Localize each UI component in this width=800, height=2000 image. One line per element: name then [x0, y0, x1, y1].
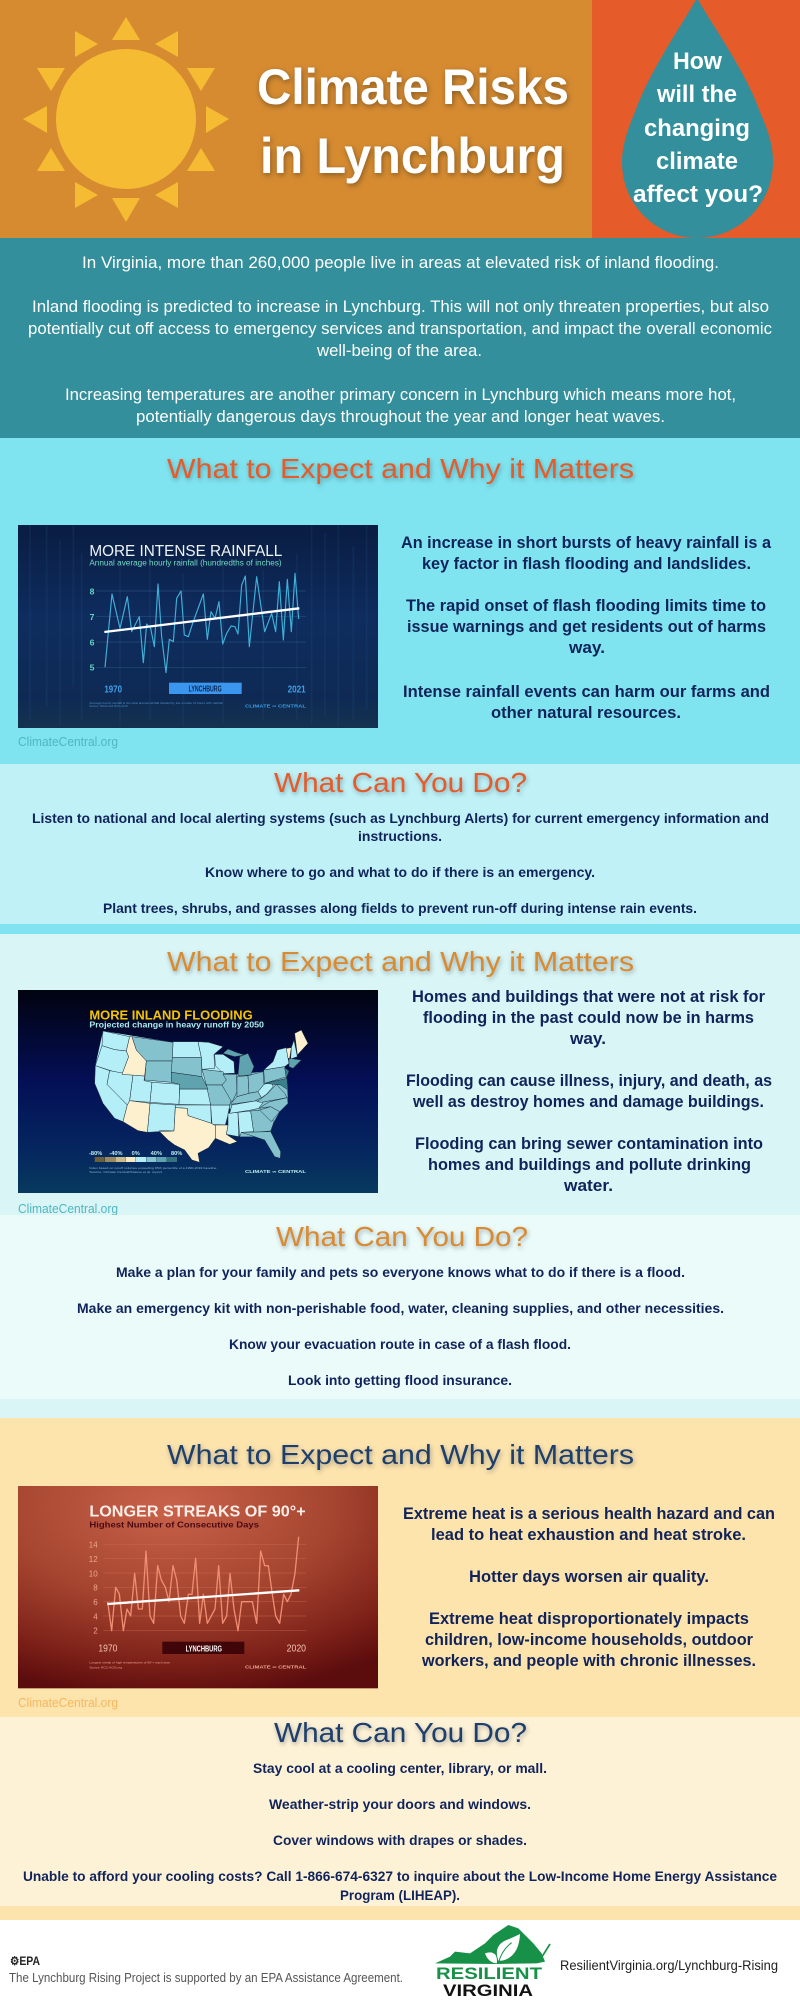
- body text: Hotter days worsen air quality.: [469, 1568, 709, 1586]
- intro paragraph 2: potentially cut off access to emergency services and transportation, and impact the overall economic: [28, 320, 772, 338]
- map: more inland flooding: -40%: [109, 1151, 123, 1157]
- chart: longer streaks of 90 degrees: Source: RCC-ACIS.org: [89, 1666, 123, 1670]
- chart: longer streaks of 90 degrees: Longest streak of high temperatures of 90°+ each year: [89, 1661, 170, 1665]
- chart: longer streaks of 90 degrees: 6: [93, 1598, 98, 1607]
- panel: introduction: [0, 238, 800, 438]
- map: more inland flooding: -80%: [89, 1151, 102, 1157]
- logo: Resilient Virginia: [435, 1925, 550, 2000]
- body text: An increase in short bursts of heavy rainfall is a: [401, 534, 772, 552]
- chart: more intense rainfall: 1970: [104, 684, 122, 695]
- logo: Resilient Virginia: RESILIENT: [436, 1964, 543, 1983]
- chart: more intense rainfall: 7: [90, 612, 95, 622]
- chart: longer streaks of 90 degrees: LYNCHBURG: [186, 1644, 222, 1653]
- body text: Intense rainfall events can harm our farms and: [403, 683, 770, 701]
- action list: Look into getting flood insurance.: [288, 1373, 512, 1388]
- body text: [403, 1505, 775, 1670]
- funding note: The Lynchburg Rising Project is supported by an EPA Assistance Agreement.: [9, 1971, 403, 1985]
- chart: more intense rainfall: LYNCHBURG: [189, 684, 222, 693]
- body text: other natural resources.: [491, 704, 681, 722]
- chart: more intense rainfall: MORE INTENSE RAINFALL: [89, 543, 283, 560]
- chart: longer streaks of 90 degrees: 12: [89, 1555, 98, 1564]
- body text: workers, and people with chronic illnesses.: [421, 1652, 756, 1670]
- image credit: ClimateCentral.org: [18, 1695, 118, 1710]
- body text: [401, 534, 772, 722]
- panel: rainfall what can you do: [0, 764, 800, 934]
- action list: [32, 811, 769, 916]
- drop question text: How: [673, 48, 722, 75]
- map: more inland flooding: Source: Climate Central/Srauss et al. report: [89, 1170, 162, 1174]
- chart: longer streaks of 90 degrees: CLIMATE ∞ CENTRAL: [245, 1665, 307, 1670]
- map: more inland flooding: 0%: [132, 1151, 140, 1157]
- chart: more intense rainfall: 6: [90, 637, 95, 647]
- chart: longer streaks of 90 degrees: 1970: [98, 1644, 118, 1655]
- body text: [406, 988, 772, 1195]
- body text: Flooding can bring sewer contamination into: [415, 1135, 763, 1153]
- panel: heat what to expect: [0, 1418, 800, 1717]
- drop question text: climate: [656, 148, 738, 175]
- action list: Plant trees, shrubs, and grasses along fields to prevent run-off during intense rain events.: [103, 901, 697, 916]
- action list: Know your evacuation route in case of a flash flood.: [229, 1337, 571, 1352]
- map: more inland flooding: 40%: [151, 1151, 162, 1157]
- chart: more intense rainfall: 5: [90, 663, 95, 673]
- chart: more intense rainfall: Average hourly rainfall is the total annual rainfall divided by the number of hours with rainfall.: [89, 702, 224, 705]
- action list: [77, 1265, 724, 1388]
- chart: more intense rainfall: Annual average hourly rainfall (hundredths of inches): [89, 558, 282, 567]
- chart: more intense rainfall: 8: [90, 586, 95, 596]
- action list: Stay cool at a cooling center, library, or mall.: [253, 1761, 547, 1776]
- body text: key factor in flash flooding and landslides.: [422, 555, 751, 573]
- panel: rainfall what to expect: [0, 438, 800, 764]
- panel: header right with drop: [592, 0, 800, 238]
- chart: more intense rainfall: Source: NOAA and RCC-ACIS: [89, 705, 128, 708]
- body text: homes and buildings and pollute drinking: [428, 1156, 751, 1174]
- image credit: ClimateCentral.org: [18, 734, 118, 749]
- drop question text: changing: [644, 115, 750, 142]
- action list: instructions.: [358, 829, 442, 844]
- intro paragraph 3: [65, 386, 736, 426]
- action list: Weather-strip your doors and windows.: [269, 1797, 531, 1812]
- panel: flooding what to expect: [0, 934, 800, 1216]
- image credit: ClimateCentral.org: [18, 1201, 118, 1216]
- panel: flooding what can you do: [0, 1215, 800, 1418]
- heading: What to Expect and Why it Matters: [167, 1439, 634, 1470]
- body text: children, low-income households, outdoor: [425, 1631, 754, 1649]
- panel: header left: [0, 0, 592, 238]
- body text: Extreme heat is a serious health hazard and can: [403, 1505, 775, 1523]
- body text: way.: [568, 639, 605, 657]
- chart: longer streaks of 90 degrees: 4: [93, 1612, 98, 1621]
- action list: Listen to national and local alerting systems (such as Lynchburg Alerts) for current emergency information and: [32, 811, 769, 826]
- heading: What Can You Do?: [274, 767, 527, 798]
- panel: heat what can you do: [0, 1717, 800, 1920]
- action list: Make an emergency kit with non-perishable food, water, cleaning supplies, and other necessities.: [77, 1301, 724, 1316]
- chart: more intense rainfall: CLIMATE ∞ CENTRAL: [245, 703, 306, 708]
- heading: What Can You Do?: [276, 1221, 528, 1252]
- chart: longer streaks of 90 degrees: LONGER STREAKS OF 90°+: [89, 1504, 306, 1521]
- map: more inland flooding: CLIMATE ∞ CENTRAL: [245, 1169, 306, 1174]
- intro paragraph 2: well-being of the area.: [316, 342, 482, 360]
- body text: well as destroy homes and damage buildings.: [412, 1093, 764, 1111]
- body text: way.: [569, 1030, 606, 1048]
- title: Climate Risks: [257, 59, 569, 115]
- heading: What to Expect and Why it Matters: [167, 453, 634, 484]
- website address: ResilientVirginia.org/Lynchburg-Rising: [560, 1957, 778, 1973]
- heading: What to Expect and Why it Matters: [167, 946, 634, 977]
- icon: water drop: [622, 0, 773, 238]
- action list: [23, 1761, 777, 1903]
- intro paragraph 3: Increasing temperatures are another primary concern in Lynchburg which means more hot,: [65, 386, 736, 404]
- body text: Flooding can cause illness, injury, and death, as: [406, 1072, 772, 1090]
- icon: sun: [23, 17, 229, 222]
- action list: Program (LIHEAP).: [340, 1888, 460, 1903]
- action list: Make a plan for your family and pets so everyone knows what to do if there is a flood.: [116, 1265, 685, 1280]
- title: in Lynchburg: [260, 128, 565, 184]
- action list: Cover windows with drapes or shades.: [273, 1833, 527, 1848]
- body text: lead to heat exhaustion and heat stroke.: [431, 1526, 746, 1544]
- chart: longer streaks of 90 degrees: Highest Number of Consecutive Days: [89, 1519, 259, 1529]
- logo: Resilient Virginia: VIRGINIA: [443, 1981, 533, 2000]
- chart: longer streaks of 90 degrees: 2020: [287, 1644, 306, 1655]
- map: more inland flooding: Index based on runoff volumes exceeding 95th percentile of a 1990-2019 baseline.: [89, 1166, 218, 1170]
- heading: What Can You Do?: [274, 1717, 527, 1748]
- chart: more intense rainfall: 2021: [288, 684, 306, 695]
- body text: water.: [563, 1177, 613, 1195]
- intro paragraph 1: In Virginia, more than 260,000 people live in areas at elevated risk of inland flooding.: [82, 254, 719, 272]
- action list: Know where to go and what to do if there is an emergency.: [205, 865, 595, 880]
- title: [257, 59, 569, 184]
- intro paragraph 2: Inland flooding is predicted to increase in Lynchburg. This will not only threaten properties, but also: [32, 298, 769, 316]
- chart: longer streaks of 90 degrees: 2: [93, 1627, 98, 1636]
- map: more inland flooding: MORE INLAND FLOODING: [89, 1008, 253, 1022]
- drop question text: [633, 48, 763, 208]
- intro paragraph 2: [28, 298, 772, 360]
- intro paragraph 3: potentially dangerous days throughout the year and longer heat waves.: [136, 408, 665, 426]
- map: more inland flooding: [18, 990, 378, 1193]
- map: more inland flooding: 80%: [171, 1151, 182, 1157]
- chart: longer streaks of 90 degrees: [18, 1486, 378, 1688]
- chart: longer streaks of 90 degrees: 10: [89, 1569, 98, 1578]
- action list: Unable to afford your cooling costs? Call 1-866-674-6327 to inquire about the Low-Income Home Energy Assistance: [23, 1869, 777, 1884]
- body text: issue warnings and get residents out of harms: [407, 618, 766, 636]
- panel: footer: [0, 1920, 800, 2000]
- drop question text: affect you?: [633, 181, 763, 208]
- chart: more intense rainfall: [18, 525, 378, 728]
- drop question text: will the: [656, 81, 737, 108]
- body text: The rapid onset of flash flooding limits time to: [406, 597, 766, 615]
- map: more inland flooding: Projected change in heavy runoff by 2050: [89, 1021, 265, 1030]
- chart: longer streaks of 90 degrees: 14: [89, 1541, 98, 1550]
- body text: flooding in the past could now be in harms: [423, 1009, 754, 1027]
- body text: Extreme heat disproportionately impacts: [429, 1610, 749, 1628]
- chart: longer streaks of 90 degrees: 8: [93, 1584, 98, 1593]
- body text: Homes and buildings that were not at risk for: [412, 988, 766, 1006]
- EPA logo: ⚙EPA: [10, 1954, 40, 1968]
